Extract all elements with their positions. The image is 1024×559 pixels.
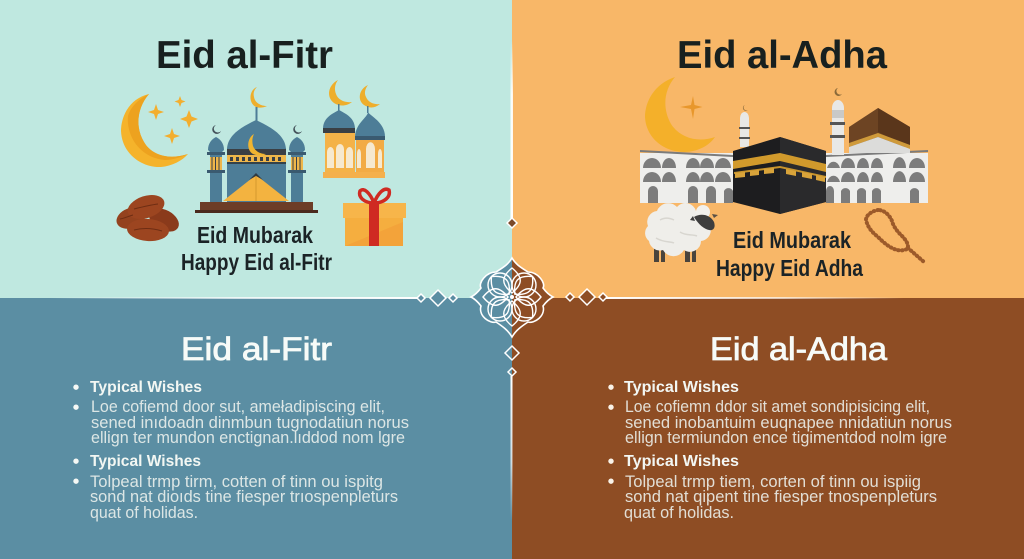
bullet list: wishes: quat of holidas. <box>90 504 198 522</box>
icon: gift box <box>343 189 406 246</box>
bullet list: wishes: Typical Wishes <box>90 453 201 470</box>
icon: crescent and star <box>645 77 715 152</box>
icon: sheep <box>645 203 718 262</box>
icon: Kaaba <box>733 137 826 214</box>
greeting: Eid Mubarak: Eid Mubarak <box>197 222 313 248</box>
greeting: Happy Eid al-Fitr: Happy Eid al-Fitr <box>181 249 332 275</box>
bullet list: wishes: sond nat dioıds tine fiesper trıospenpleturs <box>90 488 398 506</box>
bullet list: wishes: ellign ter mundon enctignan.lıddod nom lgre <box>91 429 405 447</box>
bullet list: wishes: sened inıdoadn dinmbun tugnodatiun norus <box>91 414 409 432</box>
panel: Eid al-Fitr illustration <box>0 0 512 298</box>
bullet list: wishes: Loe cofiemd door sut, ameładipiscing elit, <box>91 398 385 416</box>
icon: mosque <box>195 87 318 213</box>
icon: minarets <box>739 88 845 155</box>
ornament: left diamonds <box>417 290 457 306</box>
bullet list: wishes: sond nat qipent tine fiesper tnospenpleturs <box>625 488 937 506</box>
ornament: central rosette <box>471 258 553 337</box>
icon: domed pavilions <box>323 80 385 178</box>
icon: crescent and stars <box>121 94 198 167</box>
bullet list: wishes: Typical Wishes <box>624 379 739 396</box>
icon: rear building <box>849 108 910 153</box>
bullet list: wishes <box>608 379 952 522</box>
greeting: Eid Mubarak: Eid Mubarak <box>733 227 851 253</box>
bullet list: wishes: Typical Wishes <box>90 379 202 396</box>
ornament: right diamonds <box>566 289 607 305</box>
heading: Eid al-Fitr: Eid al-Fitr <box>181 331 332 367</box>
icon: Grand Mosque colonnade <box>640 88 928 214</box>
bullet list: wishes: sened inobantuim euqnapee nnidatiun norus <box>625 414 952 432</box>
greeting: Happy Eid Adha: Happy Eid Adha <box>716 255 863 281</box>
bullet list: wishes: Loe cofiemn ddor sit amet sondipisicing elit, <box>625 398 930 416</box>
bullet list: wishes: ellign termiundon ence tigimentdod nolm igre <box>625 429 947 447</box>
panel: Eid al-Adha illustration <box>512 0 1024 298</box>
icon: dates <box>113 191 183 242</box>
ornament: top diamond <box>507 218 517 228</box>
bullet list: wishes: quat of holidas. <box>624 504 734 522</box>
title: Eid al-Adha: Eid al-Adha <box>677 34 887 77</box>
panel: Eid al-Fitr details <box>0 298 512 559</box>
bullet list: wishes: Tolpeal trmp tiem, corten of tinn ou ispiig <box>625 473 921 491</box>
panel: Eid al-Adha details <box>512 298 1024 559</box>
ornament: bottom diamonds <box>505 346 519 376</box>
icon: prayer beads <box>866 210 924 262</box>
heading: Eid al-Adha: Eid al-Adha <box>710 331 887 367</box>
bullet list: wishes: Typical Wishes <box>624 453 739 470</box>
bullet list: wishes <box>73 379 409 522</box>
title: Eid al-Fitr: Eid al-Fitr <box>156 34 333 77</box>
bullet list: wishes: Tolpeal trmp tirm, cotten of tinn ou ispitg <box>90 473 383 491</box>
